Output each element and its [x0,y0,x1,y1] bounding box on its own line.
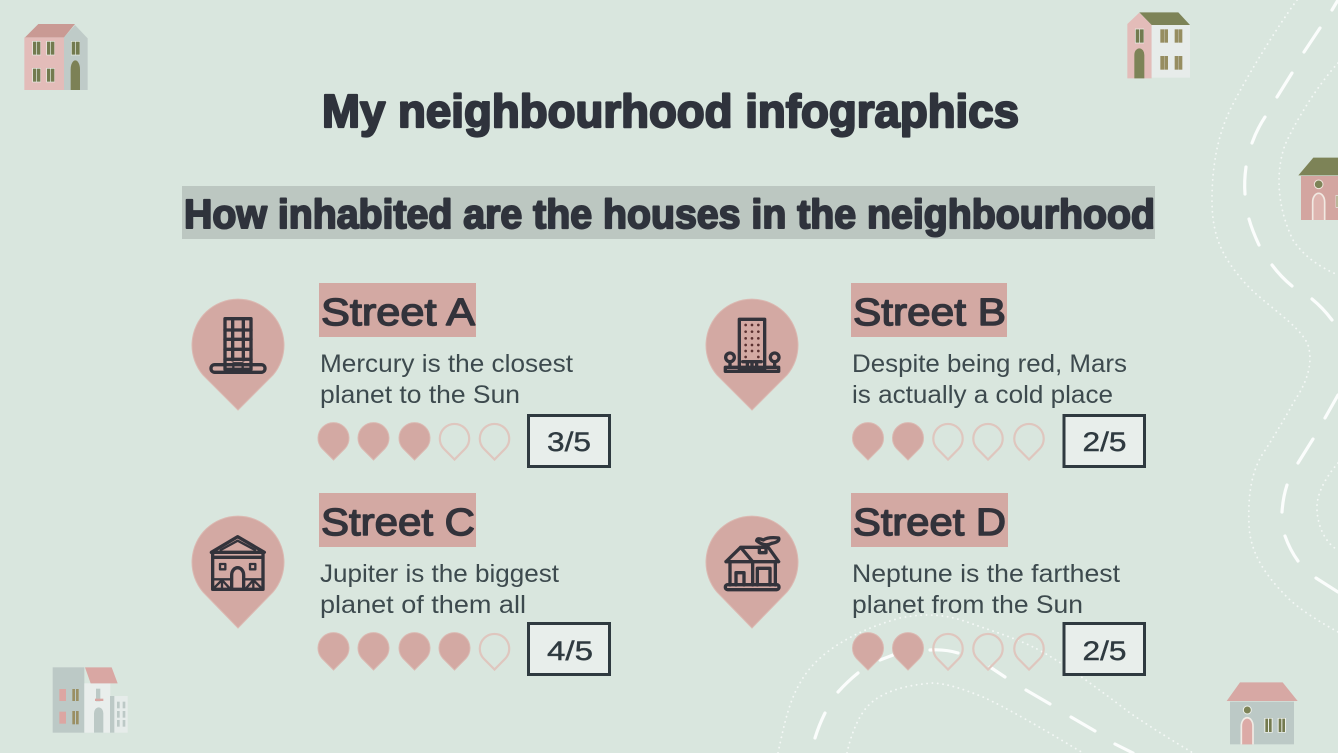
title: My neighbourhood infographics [322,85,1019,137]
rating pins: 3 of 5 [318,423,509,460]
road: right winding road [1212,0,1338,632]
heading: Street A [319,283,476,337]
heading: Street C [319,493,476,547]
description: planet to the Sun [320,381,520,409]
map pin with house icon [192,516,284,628]
house: top left pink and grey [24,24,88,90]
description: Despite being red, Mars [852,350,1127,378]
score box: 4/5 [528,624,610,674]
score box: 3/5: 3/5 [547,427,591,457]
house: bottom right grey with pink roof [1227,682,1298,744]
subtitle with highlight band: How inhabited are the houses in the neighbourhood [184,191,1155,237]
heading: Street B: Street B [853,292,1006,334]
heading: Street B [851,283,1007,337]
heading: Street A: Street A [321,292,476,334]
heading: Street C: Street C [321,502,475,544]
house: bottom left grey and white [53,667,128,733]
panel: Street D [706,493,1144,674]
map pin with cottage icon [706,516,798,628]
rating pins: 2 of 5 [852,633,1044,670]
map pin with tower icon [192,299,284,410]
score box: 4/5: 4/5 [547,636,593,666]
map pin with tall building icon [706,299,798,410]
heading: Street D: Street D [853,502,1006,544]
road: bottom winding road [778,615,1193,753]
panel: Street B [706,283,1144,466]
house: right edge pink with olive roof [1298,158,1338,220]
description: Neptune is the farthest [852,560,1120,588]
score box: 2/5: 2/5 [1082,636,1126,666]
panel: Street A [192,283,610,466]
description: planet of them all [320,591,526,619]
score box: 2/5 [1064,416,1144,466]
description: planet from the Sun [852,591,1083,619]
house: top right pink and white [1127,12,1190,78]
rating pins: 4 of 5 [318,633,509,670]
description: is actually a cold place [852,381,1113,409]
panel: Street C [192,493,610,674]
description: Mercury is the closest [320,350,573,378]
score box: 3/5 [528,416,610,466]
score box: 2/5 [1064,624,1144,674]
heading: Street D [851,493,1008,547]
rating pins: 2 of 5 [852,423,1044,460]
description: Jupiter is the biggest [320,560,559,588]
score box: 2/5: 2/5 [1082,427,1126,457]
